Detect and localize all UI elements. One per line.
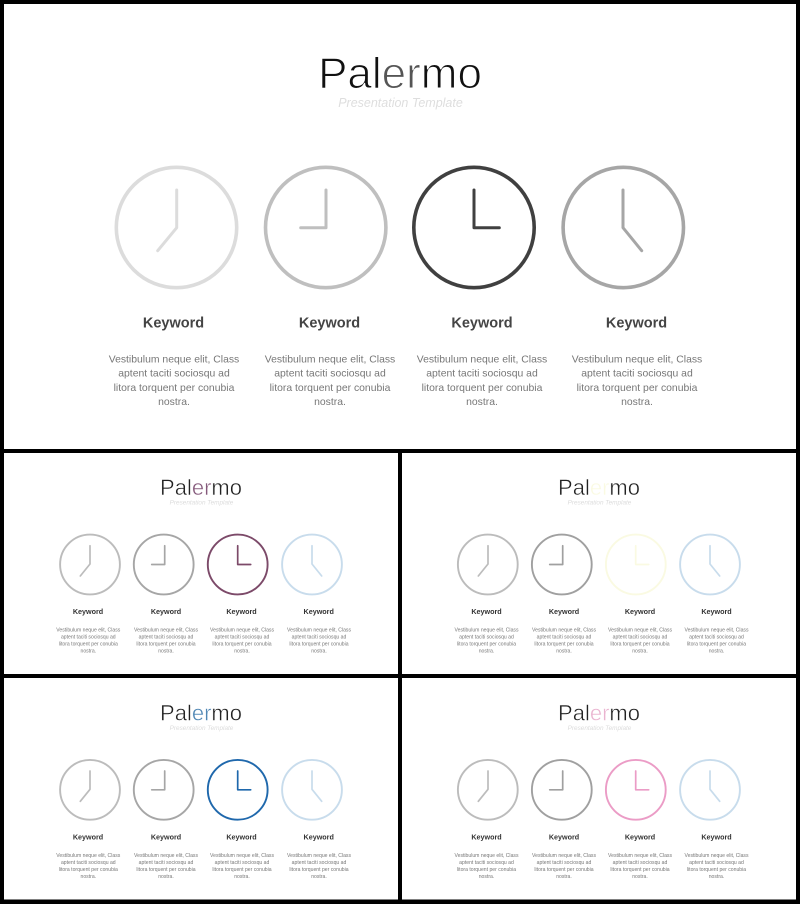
- column 2 text: [532, 832, 596, 880]
- column 3 text: Vestibulum neque elit, Class: [608, 628, 672, 634]
- column 4 text: aptent taciti sociosqu ad: [689, 860, 744, 866]
- column 4 text: Vestibulum neque elit, Class: [287, 628, 351, 634]
- column 2 text: aptent taciti sociosqu ad: [537, 860, 591, 866]
- column 2 text: nostra.: [314, 397, 346, 408]
- column 4 text: aptent taciti sociosqu ad: [292, 634, 346, 640]
- column 2 text: aptent taciti sociosqu ad: [139, 634, 193, 640]
- column 2 text: Keyword: [549, 832, 579, 842]
- column 2 text: Vestibulum neque elit, Class: [532, 628, 596, 634]
- column 2 text: litora torquent per conubia: [534, 642, 594, 648]
- column 4 text: [684, 832, 749, 880]
- column 1 text: aptent taciti sociosqu ad: [61, 860, 116, 866]
- column 4 text: Keyword: [304, 607, 334, 616]
- column 3 text: nostra.: [632, 649, 648, 655]
- column 4 text: Keyword: [304, 832, 334, 842]
- column 3 text: Vestibulum neque elit, Class: [608, 853, 672, 859]
- column 2 text: aptent taciti sociosqu ad: [537, 634, 591, 640]
- column 1 text: [454, 607, 519, 655]
- column 2 text: nostra.: [158, 649, 174, 655]
- column 4 text: litora torquent per conubia: [687, 867, 746, 873]
- clock 1: [60, 535, 120, 594]
- column 4 text: aptent taciti sociosqu ad: [689, 634, 744, 640]
- column 2 text: aptent taciti sociosqu ad: [139, 860, 193, 866]
- clock 1: [116, 167, 237, 288]
- column 4 text: litora torquent per conubia: [577, 383, 698, 394]
- column 4 text: [572, 316, 702, 408]
- column 3 text: [210, 832, 274, 880]
- column 2 text: Vestibulum neque elit, Class: [134, 628, 198, 634]
- column 3 text: [608, 832, 672, 880]
- column 1 text: nostra.: [81, 649, 96, 655]
- column 4 text: Vestibulum neque elit, Class: [572, 354, 702, 366]
- column 4 text: [287, 832, 351, 880]
- clock 4: [282, 760, 342, 820]
- column 1 text: Keyword: [73, 607, 103, 616]
- column 1 text: Vestibulum neque elit, Class: [454, 628, 519, 634]
- clock 3: [208, 760, 268, 820]
- column 3 text: aptent taciti sociosqu ad: [215, 634, 269, 640]
- panel: blue variant: [4, 678, 398, 900]
- clock 3: [606, 535, 666, 594]
- column 1 text: nostra.: [81, 874, 96, 880]
- column 3 text: aptent taciti sociosqu ad: [215, 860, 269, 866]
- column 2 text: [134, 832, 198, 880]
- column 2 text: litora torquent per conubia: [270, 383, 391, 394]
- column 1 text: litora torquent per conubia: [457, 642, 516, 648]
- column 3 text: Vestibulum neque elit, Class: [210, 628, 274, 634]
- panel: main slide: [4, 4, 796, 449]
- column 1 text: litora torquent per conubia: [59, 867, 118, 873]
- clock 4: [563, 167, 684, 288]
- column 3 text: aptent taciti sociosqu ad: [613, 860, 667, 866]
- subtitle: Presentation Template: [170, 500, 234, 506]
- column 3 text: Keyword: [625, 832, 655, 842]
- column 2 text: Keyword: [299, 316, 360, 332]
- column 4 text: litora torquent per conubia: [687, 642, 746, 648]
- column 2 text: [265, 316, 395, 408]
- column 3 text: nostra.: [234, 649, 250, 655]
- column 1 text: Vestibulum neque elit, Class: [454, 853, 519, 859]
- column 2 text: nostra.: [556, 874, 572, 880]
- clock 3: [414, 167, 534, 288]
- column 2 text: aptent taciti sociosqu ad: [274, 368, 386, 380]
- column 3 text: Keyword: [451, 316, 513, 332]
- column 2 text: Keyword: [549, 607, 579, 616]
- column 3 text: litora torquent per conubia: [610, 642, 670, 648]
- column 1 text: Vestibulum neque elit, Class: [56, 628, 121, 634]
- column 4 text: litora torquent per conubia: [289, 642, 349, 648]
- panel: pink variant: [402, 678, 796, 900]
- clock 1: [60, 760, 120, 820]
- clock 2: [266, 167, 386, 288]
- column 4 text: litora torquent per conubia: [289, 867, 349, 873]
- clock 2: [532, 760, 592, 820]
- column 4 text: Vestibulum neque elit, Class: [287, 853, 351, 859]
- title: blue accent: Palermo: [160, 700, 242, 726]
- column 2 text: litora torquent per conubia: [136, 867, 196, 873]
- title: purple accent: Palermo: [160, 475, 242, 500]
- clock 3: [606, 760, 666, 820]
- column 4 text: nostra.: [709, 649, 724, 655]
- subtitle: Presentation Template: [568, 725, 632, 732]
- column 3 text: [417, 316, 547, 408]
- title: pale yellow accent: Palermo: [558, 475, 640, 500]
- column 3 text: nostra.: [466, 397, 498, 408]
- column 1 text: nostra.: [479, 649, 494, 655]
- column 3 text: litora torquent per conubia: [422, 383, 543, 394]
- clock 4: [680, 535, 740, 594]
- clock 3: [208, 535, 268, 594]
- column 4 text: [287, 607, 351, 655]
- column 1 text: litora torquent per conubia: [114, 383, 235, 394]
- column 4 text: [684, 607, 749, 655]
- column 3 text: aptent taciti sociosqu ad: [426, 368, 538, 380]
- column 1 text: [109, 316, 239, 408]
- column 1 text: [56, 832, 121, 880]
- clock 1: [458, 760, 518, 820]
- column 2 text: nostra.: [158, 874, 174, 880]
- column 1 text: aptent taciti sociosqu ad: [459, 860, 514, 866]
- column 1 text: Keyword: [73, 832, 103, 842]
- column 4 text: nostra.: [311, 874, 327, 880]
- column 4 text: aptent taciti sociosqu ad: [292, 860, 346, 866]
- column 4 text: nostra.: [621, 397, 653, 408]
- column 3 text: nostra.: [632, 874, 648, 880]
- column 4 text: Keyword: [701, 832, 732, 842]
- column 1 text: aptent taciti sociosqu ad: [118, 368, 230, 380]
- clock 2: [134, 760, 194, 820]
- column 1 text: Vestibulum neque elit, Class: [109, 354, 239, 366]
- clock 2: [134, 535, 194, 594]
- column 3 text: Keyword: [226, 832, 257, 842]
- panel: yellow variant: [402, 453, 796, 674]
- column 2 text: litora torquent per conubia: [136, 642, 196, 648]
- panel: purple variant: [4, 453, 398, 674]
- column 1 text: [56, 607, 121, 655]
- column 2 text: [532, 607, 596, 655]
- title: Palermo: Palermo: [318, 49, 482, 98]
- column 4 text: Keyword: [606, 316, 667, 332]
- column 1 text: aptent taciti sociosqu ad: [61, 634, 116, 640]
- column 4 text: Vestibulum neque elit, Class: [684, 628, 749, 634]
- column 4 text: aptent taciti sociosqu ad: [581, 368, 693, 380]
- column 4 text: nostra.: [311, 649, 327, 655]
- subtitle: Presentation Template: [338, 96, 463, 110]
- column 1 text: Vestibulum neque elit, Class: [56, 853, 121, 859]
- column 4 text: Keyword: [701, 607, 732, 616]
- column 2 text: Vestibulum neque elit, Class: [265, 354, 395, 366]
- column 1 text: Keyword: [471, 832, 502, 842]
- column 4 text: nostra.: [709, 874, 724, 880]
- column 2 text: Vestibulum neque elit, Class: [134, 853, 198, 859]
- column 3 text: [210, 607, 274, 655]
- column 4 text: Vestibulum neque elit, Class: [684, 853, 749, 859]
- column 3 text: Keyword: [226, 607, 257, 616]
- column 1 text: nostra.: [158, 397, 190, 408]
- clock 2: [532, 535, 592, 594]
- column 1 text: Keyword: [143, 316, 204, 332]
- subtitle: Presentation Template: [170, 725, 234, 732]
- subtitle: Presentation Template: [568, 500, 632, 506]
- clock 1: [458, 535, 518, 594]
- column 1 text: litora torquent per conubia: [59, 642, 118, 648]
- column 1 text: aptent taciti sociosqu ad: [459, 634, 514, 640]
- column 2 text: nostra.: [556, 649, 572, 655]
- title: pink accent: Palermo: [558, 700, 640, 726]
- column 3 text: nostra.: [234, 874, 250, 880]
- column 1 text: [454, 832, 519, 880]
- clock 4: [282, 535, 342, 594]
- column 3 text: aptent taciti sociosqu ad: [613, 634, 667, 640]
- clock 4: [680, 760, 740, 820]
- column 2 text: [134, 607, 198, 655]
- column 3 text: Vestibulum neque elit, Class: [417, 354, 547, 366]
- column 2 text: Vestibulum neque elit, Class: [532, 853, 596, 859]
- column 3 text: [608, 607, 672, 655]
- column 2 text: Keyword: [151, 607, 181, 616]
- column 1 text: Keyword: [471, 607, 502, 616]
- column 2 text: Keyword: [151, 832, 181, 842]
- column 1 text: litora torquent per conubia: [457, 867, 516, 873]
- column 3 text: Vestibulum neque elit, Class: [210, 853, 274, 859]
- column 2 text: litora torquent per conubia: [534, 867, 594, 873]
- column 3 text: litora torquent per conubia: [212, 642, 272, 648]
- column 3 text: Keyword: [625, 607, 655, 616]
- column 3 text: litora torquent per conubia: [212, 867, 272, 873]
- column 1 text: nostra.: [479, 874, 494, 880]
- column 3 text: litora torquent per conubia: [610, 867, 670, 873]
